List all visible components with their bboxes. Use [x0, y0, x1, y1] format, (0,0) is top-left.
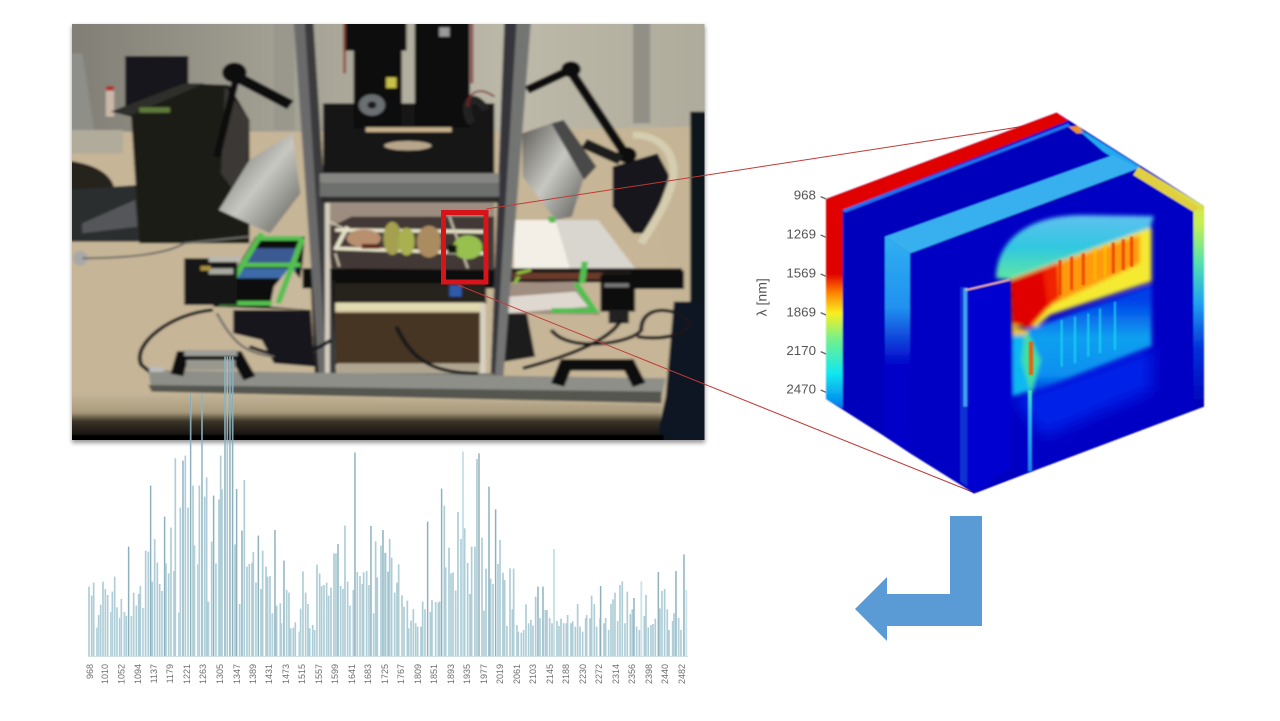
wavelength tick labels: 1977	[479, 664, 489, 684]
wavelength axis labels: 1569	[786, 266, 816, 281]
camera	[323, 103, 494, 173]
wavelength tick labels: 1557	[314, 664, 324, 684]
wavelength tick labels: 1094	[133, 664, 143, 684]
desk front	[72, 398, 664, 438]
lamp arms	[233, 75, 290, 105]
wavelength tick labels: 1263	[198, 664, 208, 684]
wavelength tick labels: 2230	[578, 664, 588, 684]
photo: hyperspectral scanner setup	[62, 13, 719, 450]
near slice bar	[960, 278, 1027, 493]
wavelength tick labels: 1767	[396, 664, 406, 684]
axis ticks	[821, 197, 826, 392]
wavelength tick labels: 1052	[116, 664, 126, 684]
wavelength tick labels: 1641	[347, 664, 357, 684]
bar chart: spectrum right half	[386, 452, 686, 656]
wavelength tick labels: 2272	[594, 664, 604, 684]
wavelength tick labels: 1347	[232, 664, 242, 684]
white sheet	[554, 218, 636, 270]
wavelength tick labels	[85, 664, 687, 684]
wavelength axis labels: 1869	[786, 304, 816, 319]
lamps	[219, 133, 301, 233]
equipment box	[111, 83, 250, 243]
handles	[177, 357, 250, 378]
wavelength tick labels: 1515	[297, 664, 307, 684]
wavelength tick labels: 2482	[677, 664, 687, 684]
wavelength tick labels: 1725	[380, 664, 390, 684]
wavelength tick labels: 1010	[100, 664, 110, 684]
left green tape board	[213, 237, 311, 310]
wavelength tick labels: 2188	[561, 664, 571, 684]
red selection rectangle	[444, 212, 486, 282]
hyperspectral data cube	[754, 113, 1204, 493]
wavelength tick labels: 2019	[495, 664, 505, 684]
cables	[140, 310, 690, 373]
bar chart baseline	[88, 656, 688, 658]
wavelength tick labels: 1683	[363, 664, 373, 684]
bar chart: spectrum left half	[89, 357, 388, 656]
wavelength tick labels: 2356	[627, 664, 637, 684]
connector lines to cube	[458, 125, 1032, 493]
glow below leaf	[1013, 347, 1152, 437]
wavelength tick labels: 1179	[165, 664, 175, 683]
wavelength tick labels: 1389	[248, 664, 258, 684]
arrow: flow from cube to spectrum	[855, 516, 982, 641]
right side background	[572, 126, 692, 150]
wavelength tick labels: 1935	[462, 664, 472, 684]
wavelength tick labels: 1599	[330, 664, 340, 684]
wavelength tick labels: 2398	[644, 664, 654, 684]
axis title: λ [nm]	[754, 278, 770, 316]
wavelength axis labels: 2470	[786, 381, 816, 396]
wavelength tick labels: 1473	[281, 664, 291, 684]
wavelength tick labels: 2440	[660, 664, 670, 684]
illuminated stage	[328, 215, 496, 272]
leaves	[347, 229, 381, 247]
leaf veins and stem detail	[1030, 237, 1132, 472]
wavelength tick labels: 1809	[413, 664, 423, 684]
wavelength axis labels: 2170	[786, 343, 816, 358]
wavelength tick labels: 2314	[611, 664, 621, 684]
wavelength tick labels: 1221	[182, 664, 192, 684]
wavelength tick labels: 1305	[215, 664, 225, 684]
wavelength tick labels: 1851	[429, 664, 439, 684]
table shadow	[303, 268, 498, 288]
wavelength tick labels: 2061	[512, 664, 522, 684]
base rail	[148, 370, 666, 397]
shadow	[72, 26, 705, 443]
wavelength tick labels: 2103	[528, 664, 538, 684]
wavelength tick labels: 1893	[446, 664, 456, 684]
wavelength tick labels: 2145	[545, 664, 555, 684]
wavelength axis labels	[786, 187, 816, 396]
wavelength axis labels: 1269	[786, 227, 816, 242]
leaf image	[996, 215, 1154, 397]
wavelength tick labels: 968	[85, 664, 95, 679]
wavelength tick labels: 1431	[264, 664, 274, 684]
wavelength axis labels: 968	[794, 187, 816, 202]
frame	[292, 24, 326, 374]
wavelength tick labels: 1137	[149, 664, 159, 683]
